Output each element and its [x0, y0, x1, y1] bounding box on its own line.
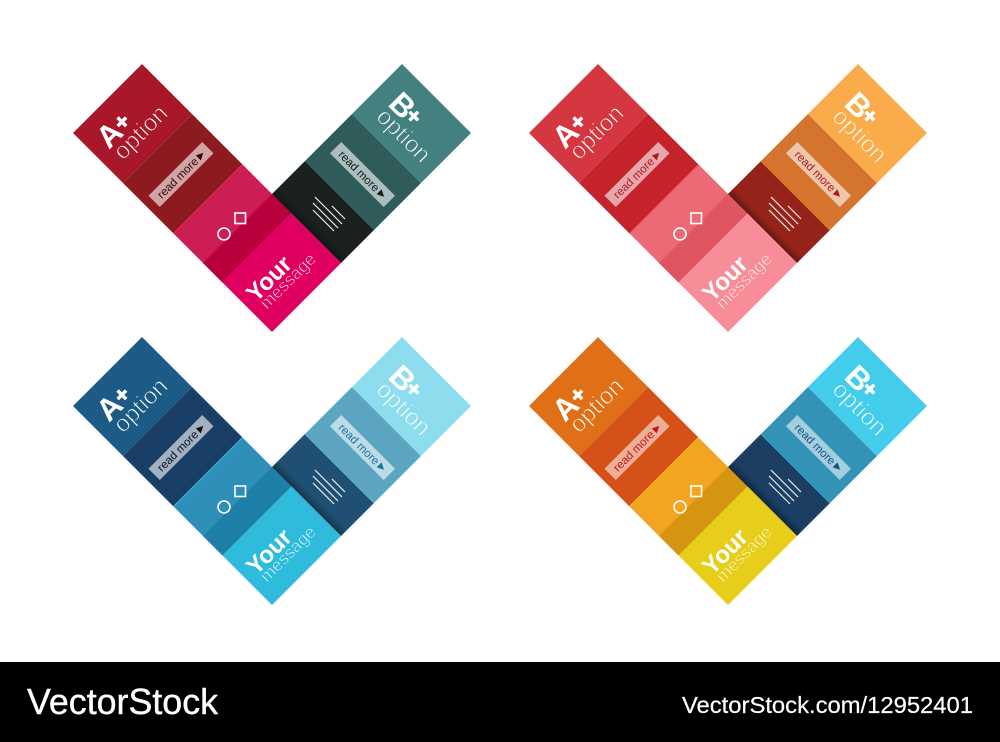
label: B+ option: + [401, 103, 427, 129]
panel: shapes [630, 164, 748, 282]
image url: VectorStock.com/12952401 [682, 692, 973, 718]
panel: read more right [761, 387, 877, 503]
chevron: crimson and teal [73, 64, 471, 332]
panel: B option [808, 337, 927, 456]
label: A+ option: + [108, 381, 135, 408]
panel: read more right [761, 114, 877, 230]
label: A+ option: option [108, 100, 173, 165]
label: A+ option: A [545, 114, 586, 155]
brand name: VectorStock [27, 681, 219, 722]
label: B+ option: B [382, 85, 423, 126]
panel: read more right [305, 387, 421, 503]
label: A+ option: + [564, 381, 591, 408]
panel: your message [222, 214, 341, 332]
button: read more: read more [612, 156, 657, 201]
label: Your message: Your [241, 524, 298, 580]
chevron: red and orange [529, 64, 927, 332]
panel: B option [352, 64, 471, 183]
icon: text lines [313, 197, 345, 231]
panel: A option [73, 337, 192, 456]
label: A+ option: + [564, 108, 591, 135]
label: Your message: message [256, 522, 320, 586]
icon: square [235, 213, 246, 224]
button: read more: read more [612, 429, 657, 474]
icon: square [691, 486, 702, 496]
icon: square [691, 213, 702, 224]
label: A+ option: + [108, 108, 135, 135]
label: A+ option: option [564, 373, 629, 438]
panel: your message [222, 486, 341, 605]
label: A+ option: A [89, 114, 130, 155]
button: read more: read more [792, 422, 837, 468]
panel: shapes [174, 164, 292, 282]
chevron: orange, yellow and cyan [529, 337, 927, 605]
label: B+ option: + [857, 103, 883, 129]
icon: circle [674, 501, 686, 513]
panel: lines [272, 434, 374, 536]
panel: read more left [579, 114, 698, 234]
panel: B option [808, 64, 927, 183]
panel: read more left [579, 387, 698, 506]
label: A+ option: option [108, 373, 173, 438]
label: A+ option: option [564, 100, 629, 165]
footer bar [0, 662, 1000, 742]
label: Your message: message [256, 249, 320, 313]
icon: text lines [769, 470, 801, 504]
label: B+ option: option [827, 376, 892, 441]
panel: read more left [123, 387, 242, 506]
panel: read more left [123, 114, 242, 234]
chevron: blue [73, 337, 471, 605]
label: B+ option: B [382, 358, 423, 399]
panel: A option [529, 64, 648, 183]
label: B+ option: option [827, 103, 892, 168]
icon: text lines [769, 197, 801, 231]
panel: your message [678, 486, 797, 605]
panel: read more right [305, 114, 421, 230]
button: read more: read more [336, 149, 381, 195]
label: A+ option: A [89, 387, 130, 428]
icon: square [235, 486, 246, 496]
panel: shapes [174, 438, 292, 556]
panel: lines [728, 161, 830, 263]
panel: shapes [630, 438, 748, 556]
label: B+ option: option [371, 376, 436, 441]
label: Your message: message [712, 522, 776, 586]
label: Your message: Your [241, 251, 298, 307]
panel: A option [73, 64, 192, 183]
panel: your message [678, 214, 797, 332]
label: B+ option: + [401, 376, 427, 402]
label: A+ option: A [545, 387, 586, 428]
button: read more: read more [156, 156, 201, 201]
button: read more: read more [156, 429, 201, 474]
label: Your message: Your [697, 251, 754, 307]
icon: circle [674, 228, 686, 240]
label: B+ option: + [857, 376, 883, 402]
panel: B option [352, 337, 471, 456]
icon: text lines [313, 470, 345, 504]
label: Your message: Your [697, 524, 754, 580]
panel: A option [529, 337, 648, 456]
panel: lines [272, 161, 374, 263]
label: Your message: message [712, 249, 776, 313]
button: read more: read more [792, 149, 837, 195]
button: read more: read more [336, 422, 381, 468]
panel: lines [728, 434, 830, 536]
icon: circle [218, 228, 230, 240]
label: B+ option: B [838, 358, 879, 399]
label: B+ option: B [838, 85, 879, 126]
icon: circle [218, 501, 230, 513]
label: B+ option: option [371, 103, 436, 168]
